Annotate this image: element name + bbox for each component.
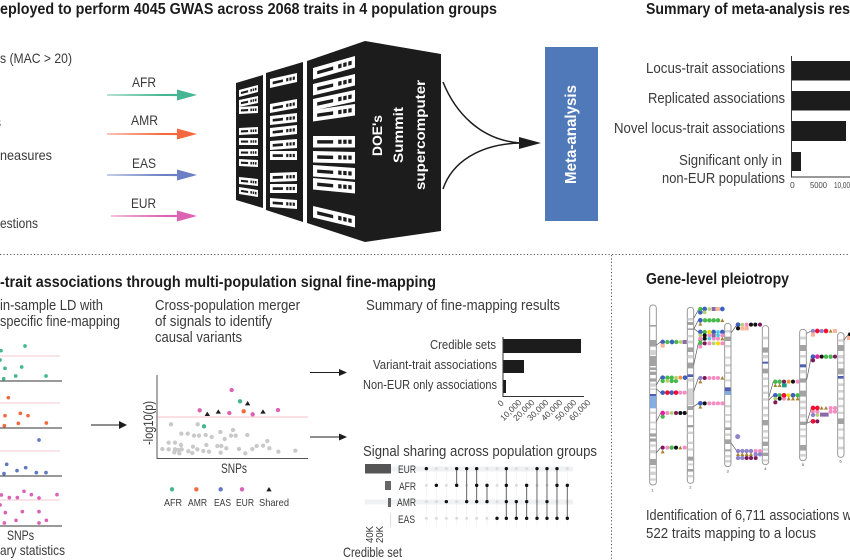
- chart: population Manhattan plots: SNPs: [7, 527, 34, 543]
- bar chart: meta-analysis results: 5000: [810, 180, 827, 190]
- chart: merged scatter plot: [140, 375, 308, 509]
- bar chart: fine-mapping results: 20,000: [511, 397, 537, 423]
- bar chart: fine-mapping results: 10,000: [498, 397, 524, 423]
- text block: cross-population merger: causal variants: [155, 330, 242, 346]
- bar chart: fine-mapping results: 50,000: [553, 397, 579, 423]
- chart: merged scatter plot: EAS: [214, 497, 231, 509]
- chromosome 5: [800, 329, 806, 467]
- chart: UpSet plot of signal sharing: 20K: [375, 526, 386, 543]
- chart: UpSet plot of signal sharing: EAS: [398, 514, 415, 526]
- chart: merged scatter plot: SNPs: [221, 460, 247, 476]
- bar chart: fine-mapping results: 40,000: [539, 397, 565, 423]
- chart: merged scatter plot: Shared: [259, 497, 289, 509]
- bar chart: meta-analysis results: [614, 56, 850, 190]
- arrow: AFR: [107, 74, 197, 100]
- bar chart: meta-analysis results: Locus-trait associations: [646, 61, 785, 77]
- chart: merged scatter plot: EUR: [236, 497, 254, 509]
- arrow: EUR: [111, 195, 197, 222]
- icon: Summit supercomputer: DOE's: [370, 115, 385, 156]
- text block: input data list: estions: [0, 215, 38, 231]
- chart: population Manhattan plots: [0, 346, 65, 558]
- chromosome 2: 2: [689, 484, 692, 489]
- chart: UpSet plot of signal sharing: AMR: [397, 497, 416, 509]
- heading: fine-mapping section: -trait associations through multi-population signal fine-mapping: [0, 274, 436, 291]
- heading: summary of fine-mapping results: Summary of fine-mapping results: [366, 298, 560, 314]
- heading: GWAS deployment: eployed to perform 4045 GWAS across 2068 traits in 4 population groups: [0, 1, 497, 18]
- chromosome 6: 6: [840, 459, 843, 464]
- bar chart: meta-analysis results: Replicated associations: [648, 91, 785, 107]
- bar chart: fine-mapping results: 30,000: [525, 397, 551, 423]
- chart: merged scatter plot: AMR: [188, 497, 207, 509]
- chromosome 1: [650, 305, 656, 492]
- bar chart: fine-mapping results: [363, 337, 593, 423]
- chromosome 4: 4: [764, 466, 767, 471]
- bar chart: meta-analysis results: Significant only in: [679, 153, 782, 169]
- chart: UpSet plot of signal sharing: 40K: [365, 526, 376, 543]
- arrow: AMR: AMR: [131, 112, 158, 128]
- arrow: EAS: EAS: [132, 155, 156, 171]
- text block: pleiotropy summary: [646, 508, 850, 542]
- bar chart: meta-analysis results: non-EUR populations: [662, 171, 785, 187]
- icon: Summit supercomputer: Summit: [391, 106, 406, 163]
- chart: merged scatter plot: -log10(p): [140, 401, 156, 445]
- text block: in-sample LD: in-sample LD with: [0, 298, 103, 314]
- bar chart: meta-analysis results: Novel locus-trait associations: [614, 121, 785, 137]
- bar chart: fine-mapping results: Variant-trait associations: [373, 357, 497, 372]
- text block: in-sample LD: [0, 298, 120, 330]
- chromosome 2: [687, 307, 694, 489]
- locus markers: squares: [661, 307, 850, 348]
- heading: gene-level pleiotropy: Gene-level pleiotropy: [646, 271, 789, 288]
- text block: cross-population merger: of signals to identify: [155, 314, 273, 330]
- arrow: merge into meta-analysis: [443, 82, 541, 189]
- chart: UpSet plot of signal sharing: AFR: [399, 481, 416, 493]
- bar chart: fine-mapping results: 60,000: [567, 397, 593, 423]
- chromosome 3: [725, 323, 731, 473]
- arrow: AFR: AFR: [132, 74, 156, 90]
- text block: input data list: [0, 50, 72, 231]
- arrow: to merger: [91, 421, 127, 429]
- arrow: EUR: EUR: [131, 195, 156, 211]
- heading: signal sharing: Signal sharing across population groups: [363, 444, 597, 460]
- locus markers: blue: [663, 309, 813, 403]
- connector lines from loci to chromosomes: [656, 310, 848, 453]
- chromosome 6: [838, 333, 844, 464]
- text block: in-sample LD: specific fine-mapping: [0, 314, 120, 330]
- chart: chromosome ideogram with pleiotropy loci: [650, 305, 850, 492]
- arrow: to fine-mapping summary: [310, 369, 347, 376]
- chart: UpSet plot of signal sharing: Credible set: [343, 544, 402, 560]
- locus markers: yellow, cyan, orange: [709, 332, 789, 395]
- chart: UpSet plot of signal sharing: [343, 464, 573, 560]
- text block: input data list: s (MAC > 20): [0, 50, 72, 66]
- bar chart: fine-mapping results: Non-EUR only associations: [363, 377, 497, 392]
- chromosome 5: 5: [802, 462, 805, 467]
- panel: meta-analysis box: Meta-analysis: [563, 85, 580, 184]
- text block: cross-population merger: [155, 298, 300, 346]
- text block: pleiotropy summary: 522 traits mapping to a locus: [646, 526, 816, 542]
- bar chart: meta-analysis results: 0: [790, 180, 795, 190]
- locus markers: green: [663, 309, 831, 448]
- icon: Summit supercomputer: [236, 41, 441, 242]
- bar chart: fine-mapping results: Credible sets: [430, 337, 496, 352]
- panel: meta-analysis box: [545, 47, 598, 221]
- chromosome 4: [762, 326, 769, 471]
- arrow: to signal sharing: [310, 434, 347, 440]
- icon: Summit supercomputer: supercomputer: [413, 79, 428, 190]
- chromosome 1: 1: [652, 487, 655, 492]
- arrow: EAS: [107, 155, 197, 180]
- chart: population Manhattan plots: ary statistics: [0, 542, 65, 558]
- bar chart: fine-mapping results: 0: [495, 398, 506, 408]
- chart: merged scatter plot: AFR: [164, 497, 182, 509]
- locus markers: pink: [667, 325, 835, 451]
- text block: input data list: neasures: [0, 147, 52, 163]
- chart: UpSet plot of signal sharing: EUR: [398, 464, 416, 476]
- locus markers: triangles: [661, 318, 833, 456]
- arrow: AMR: [107, 112, 197, 140]
- locus markers: purple: [700, 331, 822, 458]
- locus markers: red and magenta: [667, 331, 826, 421]
- chromosome 3: 3: [727, 468, 730, 473]
- locus markers: light green: [667, 309, 817, 415]
- text block: cross-population merger: Cross-population merger: [155, 298, 300, 314]
- locus markers: plum and black: [663, 325, 835, 458]
